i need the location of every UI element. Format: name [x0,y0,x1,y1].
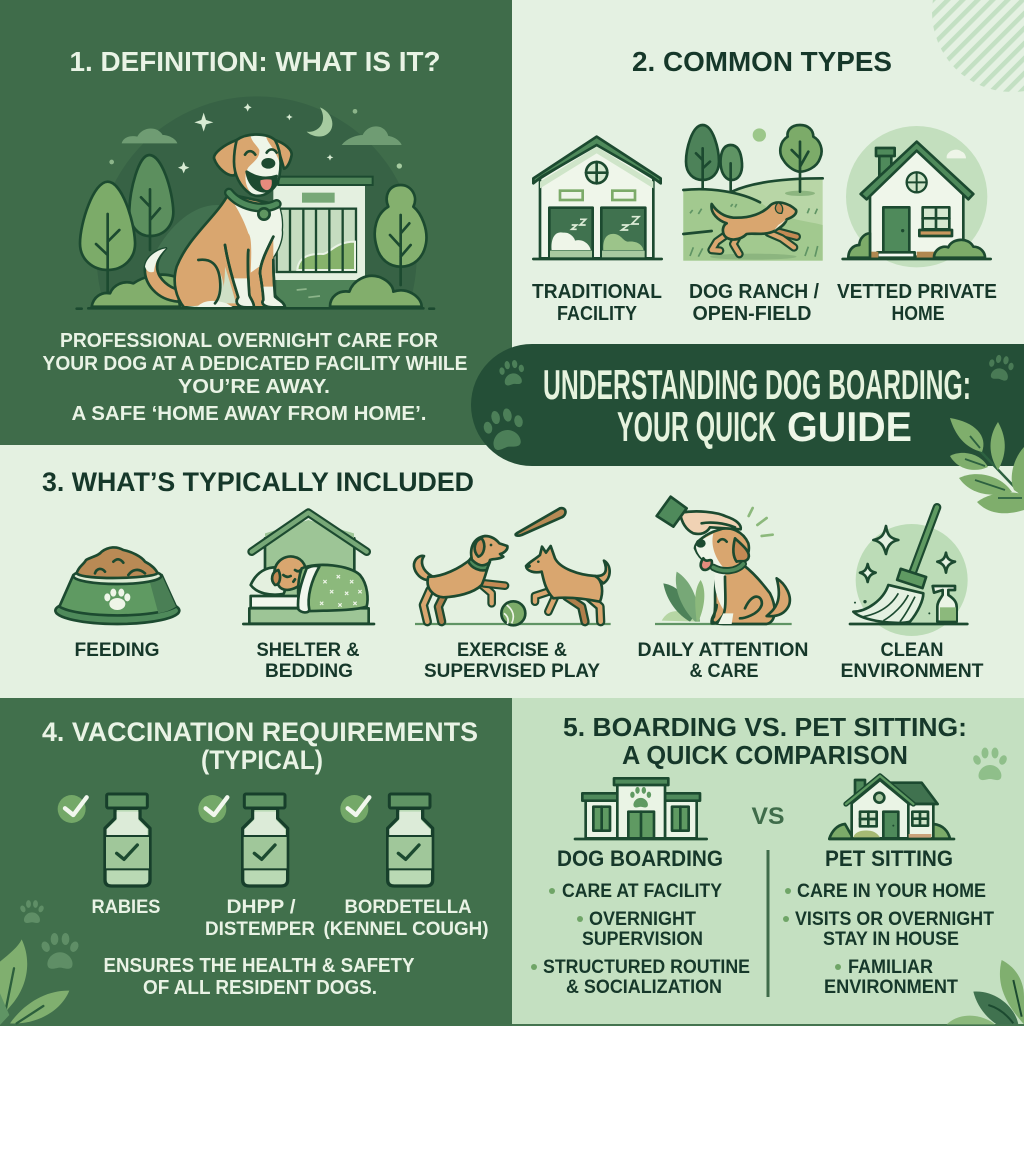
column: dog boarding: STRUCTURED ROUTINE [543,957,750,978]
panel: what's typically included [0,345,1024,698]
decoration: paw print [972,748,1008,780]
icon: daily attention and care [655,497,792,624]
column: pet sitting [783,846,994,998]
icon: DHPP vial [198,794,288,886]
heading: vaccination: 4. VACCINATION REQUIREMENTS [42,717,478,747]
icon: clean environment [850,507,968,636]
safety note: OF ALL RESIDENT DOGS. [143,977,377,999]
decoration: paw prints [19,900,80,969]
column: pet sitting: ENVIRONMENT [824,977,958,998]
heading: comparison: 5. BOARDING VS. PET SITTING: [563,712,967,742]
column: pet sitting: FAMILIAR [848,957,933,978]
banner subtitle: YOUR QUICK [617,403,776,450]
description text: PROFESSIONAL OVERNIGHT CARE FOR [60,330,439,352]
item labels: EXERCISE & [457,640,567,661]
heading: definition: 1. DEFINITION: WHAT IS IT? [70,46,440,77]
item labels: ENVIRONMENT [840,661,984,682]
icon: feeding bowl [55,547,179,624]
icon: dog ranch open field [683,125,823,261]
banner subtitle: GUIDE [787,403,912,450]
illustration: happy dog beside kennel at night [77,96,434,309]
type labels: OPEN-FIELD [692,303,812,325]
item labels [74,640,984,682]
heading: comparison: A QUICK COMPARISON [622,740,908,770]
column: pet sitting: PET SITTING [825,846,953,871]
item labels: SUPERVISED PLAY [424,661,600,682]
decorative striped circle [932,0,1024,92]
type labels [532,281,997,325]
title banner [471,344,1024,466]
heading: included: 3. WHAT’S TYPICALLY INCLUDED [42,467,474,497]
icon: vetted private home [843,126,991,267]
panel: boarding vs pet sitting [512,698,1024,1026]
panel: vaccination requirements [0,698,512,1026]
vaccine labels: DISTEMPER [205,919,315,940]
vaccine labels: BORDETELLA [344,897,472,918]
vaccine labels [92,897,488,940]
icon: boarding facility building [575,778,707,839]
vaccine labels: (KENNEL COUGH) [324,919,488,940]
icon: shelter and bedding [243,513,374,624]
type labels: FACILITY [557,303,638,325]
heading: comparison [563,712,967,770]
item labels: BEDDING [265,661,353,682]
item labels: DAILY ATTENTION [638,640,808,661]
heading: vaccination: (TYPICAL) [201,745,323,775]
column: dog boarding: SUPERVISION [582,929,703,950]
column: dog boarding: DOG BOARDING [557,846,723,871]
column: dog boarding: & SOCIALIZATION [566,977,722,998]
column: pet sitting: STAY IN HOUSE [823,929,959,950]
icon: traditional facility [533,137,662,259]
safety note: ENSURES THE HEALTH & SAFETY [104,955,415,977]
vaccine labels: DHPP / [226,897,296,918]
panel: definition [0,0,512,445]
item labels: SHELTER & [256,640,360,661]
decoration: branch of leaves [950,418,1024,513]
item labels: & CARE [690,661,758,682]
type labels: HOME [892,303,944,325]
vs label: VS [752,803,784,830]
panel: common types [512,0,1024,345]
description text [42,330,468,425]
description text: A SAFE ‘HOME AWAY FROM HOME’. [72,403,426,425]
decoration: leaves [0,939,69,1025]
type labels: TRADITIONAL [532,281,662,303]
column: dog boarding: CARE AT FACILITY [562,881,722,902]
type labels: DOG RANCH / [689,281,819,303]
icon: rabies vial [58,794,150,886]
description text: YOUR DOG AT A DEDICATED FACILITY WHILE [42,353,468,375]
decoration: leaves [947,960,1024,1024]
description text: YOU’RE AWAY. [178,376,330,398]
safety note [104,955,415,999]
heading: vaccination [42,717,478,775]
icon: bordetella vial [340,794,433,886]
item labels: CLEAN [880,640,944,661]
divider [766,850,770,997]
decoration: banner paw prints [481,353,1015,452]
heading: common types: 2. COMMON TYPES [632,46,892,77]
column: pet sitting: VISITS OR OVERNIGHT [795,909,994,930]
vaccine labels: RABIES [92,897,160,918]
column: dog boarding: OVERNIGHT [589,909,696,930]
type labels: VETTED PRIVATE [837,281,997,303]
icon: exercise and supervised play [414,508,611,625]
column: pet sitting: CARE IN YOUR HOME [797,881,986,902]
icon: pet sitting house [829,776,954,839]
item labels: FEEDING [74,640,160,661]
column: dog boarding [531,846,750,998]
